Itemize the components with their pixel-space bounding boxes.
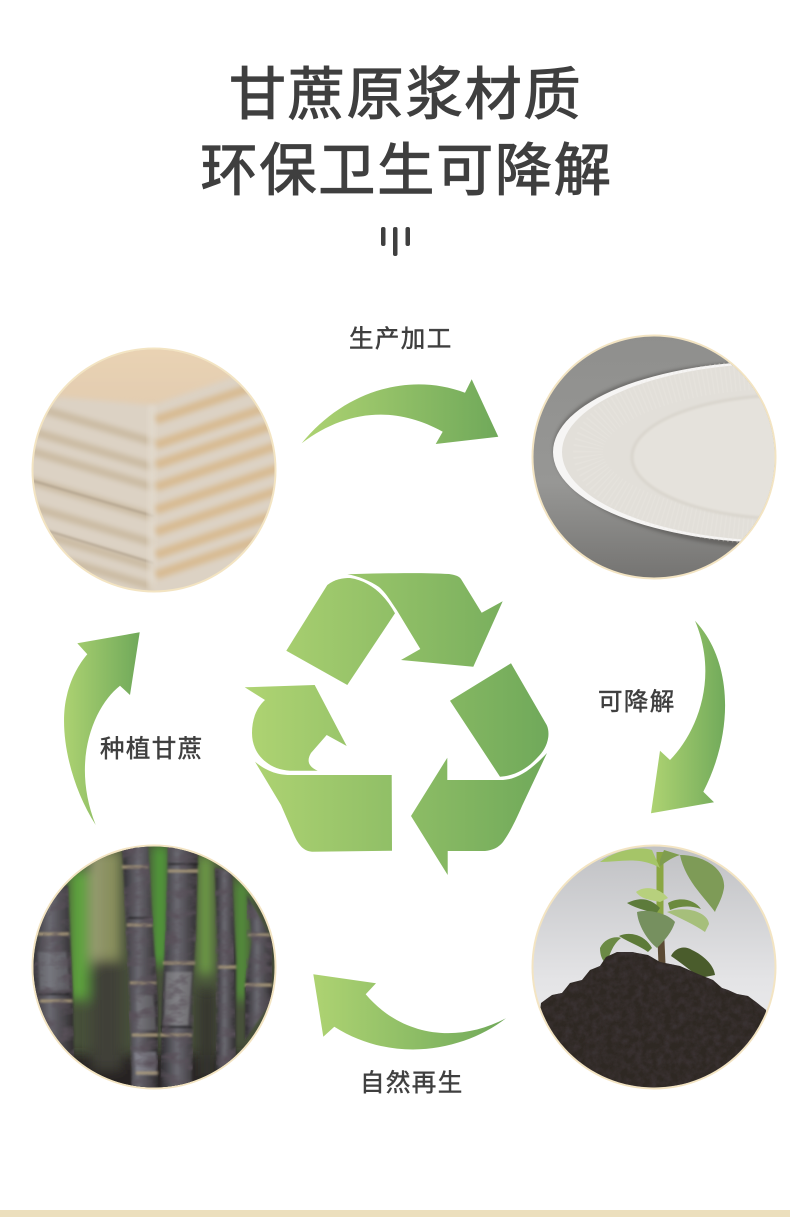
recycle arrow: top head [347, 573, 503, 667]
leaves [600, 848, 660, 868]
icon: three vertical bars [381, 227, 410, 256]
stalk nodes [38, 867, 272, 1073]
soil mound [540, 952, 766, 1088]
stem [656, 852, 664, 918]
photo: seedling in soil [530, 843, 780, 1100]
dark seams on left face [30, 480, 153, 563]
title: 环保卫生可降解 [200, 139, 613, 203]
title: 甘蔗原浆材质 [229, 63, 582, 127]
photo: plywood board [32, 348, 276, 592]
label: natural regeneration: 自然再生 [360, 1069, 464, 1097]
recycle arrow: bottom right head [411, 753, 547, 875]
label: biodegradable: 可降解 [598, 688, 676, 716]
label: production: 生产加工 [349, 325, 453, 353]
photo: sugarcane stalks [30, 843, 280, 1100]
recycle arrow: right band [450, 663, 548, 777]
stalk mottling [30, 843, 272, 1095]
arrow: to sugarcane [313, 974, 506, 1049]
title [200, 63, 613, 203]
recycle arrow: top band [286, 578, 395, 685]
label: plant sugarcane: 种植甘蔗 [100, 735, 204, 763]
right face stripes [156, 376, 285, 575]
left face stripes [25, 404, 153, 587]
recycling symbol [245, 573, 548, 875]
bottom cream strip [0, 1210, 790, 1217]
stalk highlights [38, 952, 70, 990]
photo: white pulp plate [530, 333, 790, 583]
arrow: to plate [302, 379, 498, 444]
arrow: to soil [651, 621, 725, 813]
recycle arrow: left head [245, 685, 347, 771]
recycle arrow: bottom band [255, 762, 392, 852]
stalks [30, 843, 272, 1095]
arrow: to plywood [64, 632, 140, 825]
blurred background stems [66, 846, 254, 1088]
top face of board [58, 350, 231, 405]
light centre edge of board [148, 405, 156, 590]
